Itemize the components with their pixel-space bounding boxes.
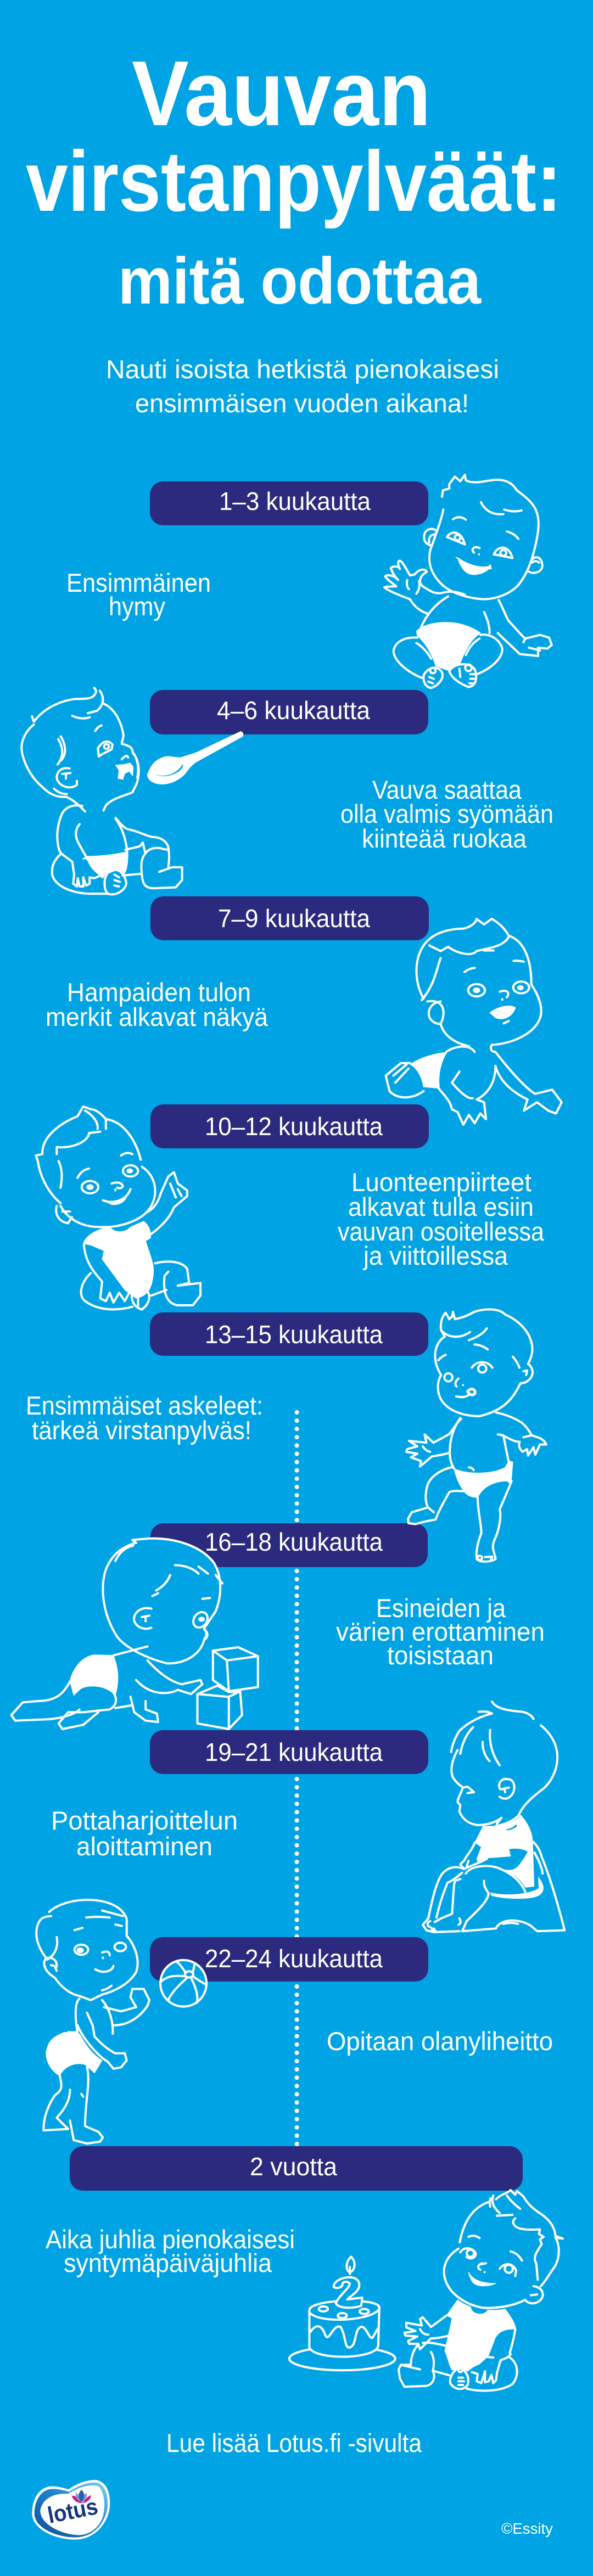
- text: birthday: [46, 2225, 295, 2277]
- icon: baby and spoon: [21, 688, 243, 894]
- logo: Lotus: [32, 2480, 110, 2540]
- pill: 19-21 months: 19–21 kuukautta: [205, 1738, 383, 1766]
- icon: baby throwing ball: [36, 1900, 149, 2143]
- text: first smile: hymy: [109, 592, 165, 621]
- text: teething: merkit alkavat näkyä: [46, 1002, 268, 1031]
- pill: 4-6 months: 4–6 kuukautta: [217, 696, 370, 725]
- text: teething: Hampaiden tulon: [67, 978, 251, 1007]
- title: [26, 42, 562, 318]
- icon: crawling baby with tongue out: [386, 919, 562, 1125]
- intro text: Nauti isoista hetkistä pienokaisesi: [106, 355, 499, 384]
- pill: 16-18 months: [150, 1523, 428, 1567]
- icon: beach ball: [160, 1960, 206, 2007]
- pill: 16-18 months: 16–18 kuukautta: [205, 1528, 383, 1556]
- text: birthday: Aika juhlia pienokaisesi: [46, 2225, 295, 2254]
- text: potty training: aloittaminen: [76, 1832, 212, 1861]
- pill: 22-24 months: [150, 1937, 428, 1982]
- text: first steps: tärkeä virstanpylväs!: [32, 1416, 251, 1445]
- text: objects and colours: Esineiden ja: [376, 1593, 506, 1623]
- pill: 2 years: [70, 2146, 523, 2191]
- pill: 13-15 months: [150, 1312, 428, 1356]
- text: first steps: [26, 1391, 263, 1445]
- intro text: ensimmäisen vuoden aikana!: [135, 389, 469, 418]
- text: personality: ja viittoillessa: [362, 1241, 508, 1270]
- text: read more: Lue lisää Lotus.fi -sivulta: [166, 2428, 422, 2457]
- icon: pointing baby: [36, 1107, 200, 1310]
- pill: 7-9 months: 7–9 kuukautta: [218, 904, 370, 933]
- icon: crawling baby with blocks: [12, 1539, 258, 1729]
- text: birthday: syntymäpäiväjuhlia: [64, 2248, 272, 2277]
- text: personality: alkavat tulla esiin: [348, 1192, 534, 1221]
- icon: waving smiling baby: [384, 475, 552, 688]
- pill: 22-24 months: 22–24 kuukautta: [205, 1944, 383, 1973]
- icon: baby on potty: [423, 1702, 564, 1932]
- title: Vauvan: [132, 42, 431, 145]
- icon: birthday cake with candle: [289, 2257, 395, 2370]
- text: solid food: olla valmis syömään: [340, 799, 553, 828]
- text: solid food: Vauva saattaa: [372, 775, 522, 804]
- dotted timeline: [295, 1412, 299, 2146]
- pill: 4-6 months: [150, 690, 428, 734]
- text: potty training: Pottaharjoittelun: [51, 1806, 238, 1835]
- title: mitä odottaa: [118, 244, 482, 318]
- pill: 1-3 months: [150, 481, 428, 525]
- pill: 13-15 months: 13–15 kuukautta: [205, 1320, 383, 1349]
- pill: 2 years: 2 vuotta: [250, 2152, 337, 2181]
- pill: 7-9 months: [150, 896, 429, 940]
- text: solid food: [340, 775, 553, 853]
- text: first smile: [66, 568, 211, 621]
- text: personality: vauvan osoitellessa: [338, 1217, 545, 1246]
- text: objects and colours: värien erottaminen: [336, 1617, 545, 1646]
- icon: walking baby: [406, 1309, 546, 1562]
- text: first steps: Ensimmäiset askeleet:: [26, 1391, 263, 1420]
- pill: 19-21 months: [150, 1730, 428, 1774]
- logo wordmark: lotus: [46, 2493, 100, 2528]
- pill: 1-3 months: 1–3 kuukautta: [219, 487, 371, 515]
- text: first smile: Ensimmäinen: [66, 568, 211, 597]
- text: objects and colours: toisistaan: [387, 1641, 494, 1670]
- text: personality: Luonteenpiirteet: [351, 1168, 532, 1197]
- text: overarm throw: Opitaan olanyliheitto: [327, 2027, 553, 2056]
- text: potty training: [51, 1806, 238, 1861]
- intro text: [106, 355, 499, 418]
- text: teething: [46, 978, 268, 1031]
- icon: two-year-old baby: [399, 2190, 563, 2390]
- pill: 10-12 months: [150, 1104, 429, 1148]
- text: solid food: kiinteää ruokaa: [362, 824, 527, 853]
- text: copyright: ©Essity: [501, 2520, 553, 2537]
- text: personality: [338, 1168, 545, 1270]
- pill: 10-12 months: 10–12 kuukautta: [205, 1112, 383, 1141]
- text: objects and colours: [336, 1593, 545, 1670]
